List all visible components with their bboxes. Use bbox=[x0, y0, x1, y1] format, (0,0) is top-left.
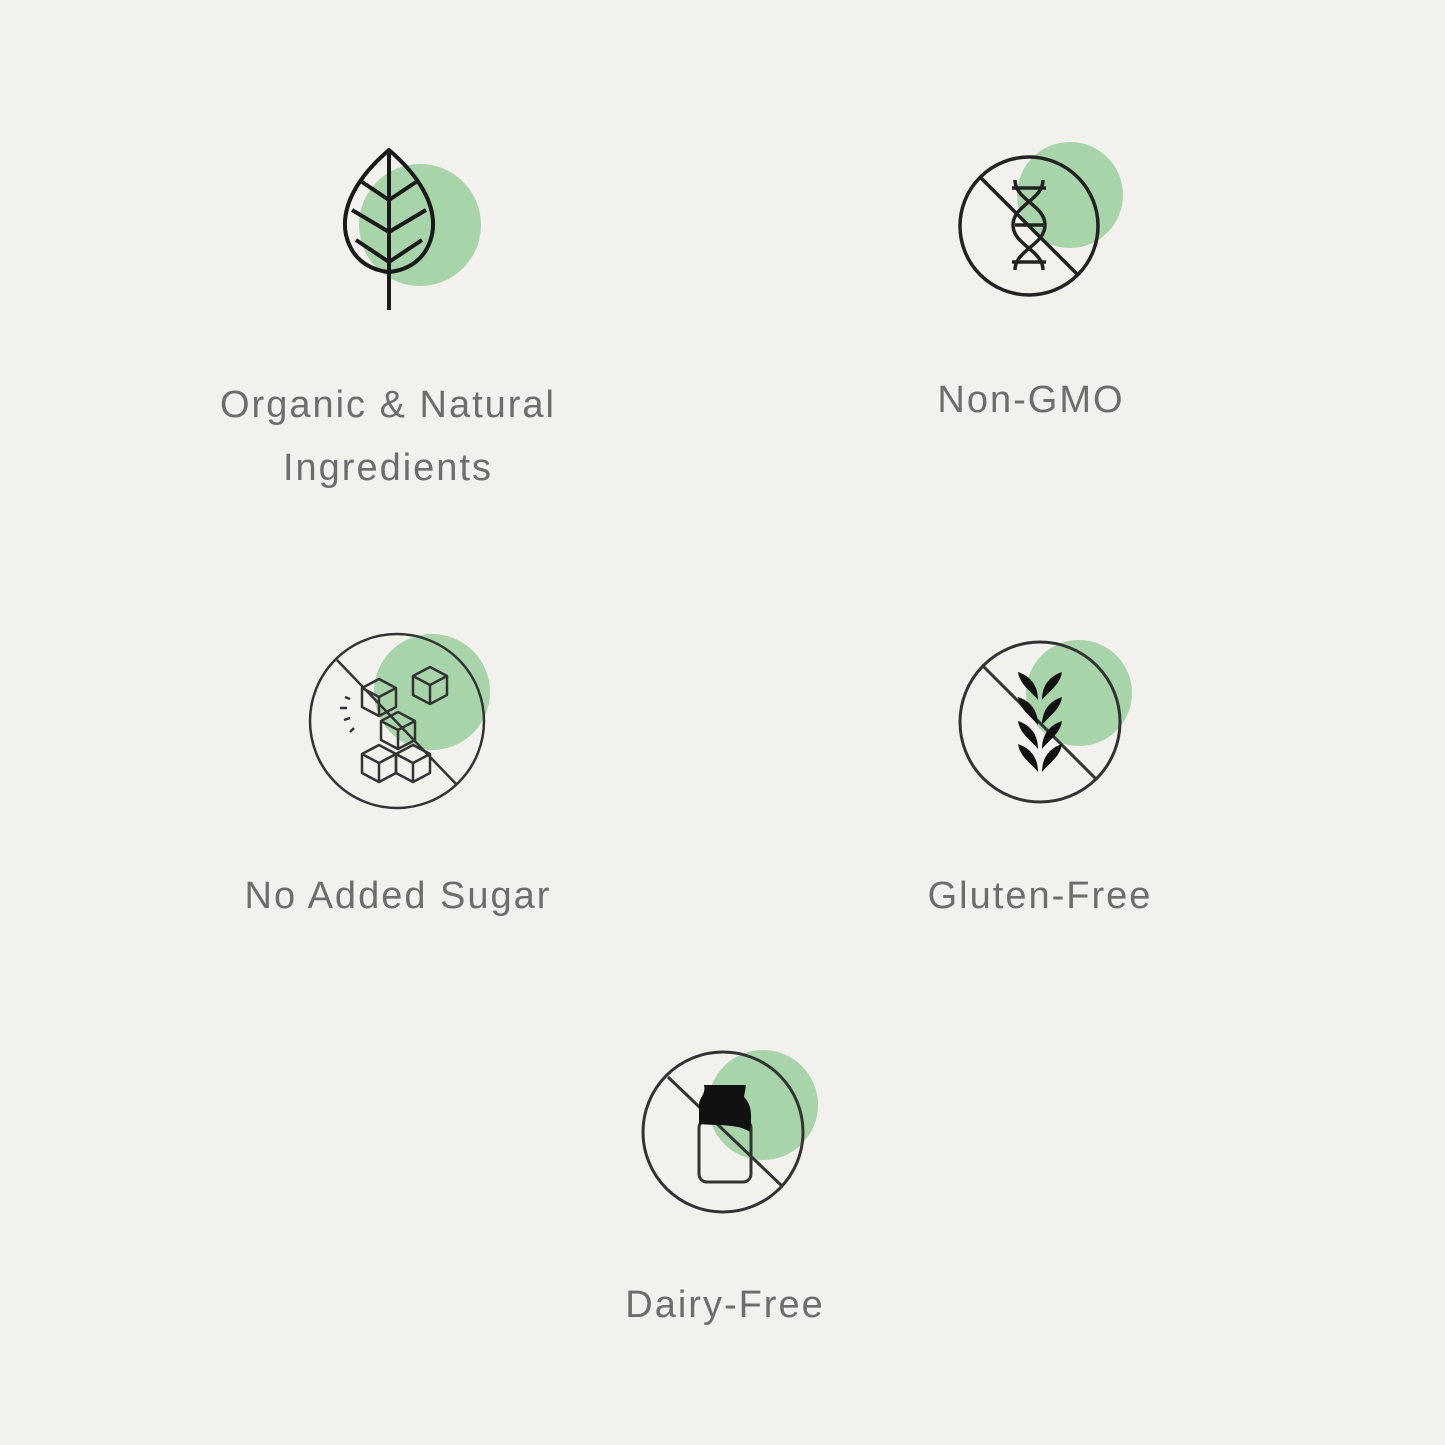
label: no added sugar: No Added Sugar bbox=[245, 875, 551, 917]
panel: no added sugar bbox=[245, 634, 551, 917]
icon: DNA crossed bbox=[960, 142, 1123, 295]
label: organic bbox=[220, 384, 556, 489]
label: dairy-free: Dairy-Free bbox=[625, 1284, 825, 1326]
label: organic: Organic & Natural bbox=[220, 384, 556, 426]
icon: sugar cubes crossed bbox=[310, 634, 490, 808]
icon: milk bottle crossed bbox=[643, 1050, 818, 1212]
panel: gluten-free bbox=[928, 640, 1152, 917]
panel: non-GMO bbox=[937, 142, 1125, 421]
panel: organic bbox=[220, 150, 556, 489]
label: gluten-free: Gluten-Free bbox=[928, 875, 1152, 917]
label: non-GMO: Non-GMO bbox=[937, 379, 1125, 421]
panel: dairy-free bbox=[625, 1050, 825, 1326]
icon: wheat crossed bbox=[960, 640, 1132, 802]
icon: leaf bbox=[345, 150, 481, 310]
label: organic: Ingredients bbox=[283, 447, 493, 489]
